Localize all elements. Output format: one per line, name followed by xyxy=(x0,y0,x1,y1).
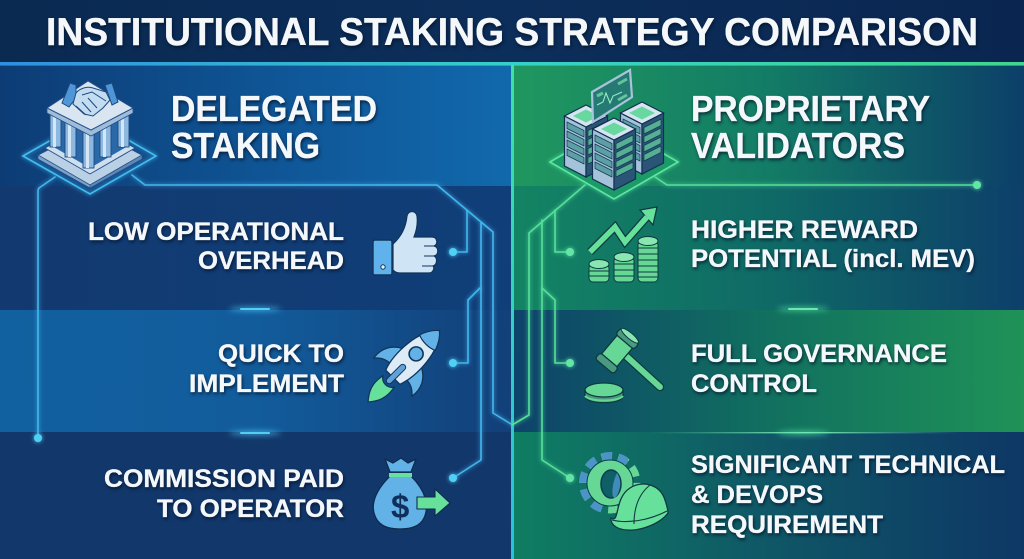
heading: proprietary validators: PROPRIETARY xyxy=(691,88,930,129)
panel: delegated staking xyxy=(0,65,512,559)
icon: gavel xyxy=(585,326,660,403)
text: significant technical devops requirement xyxy=(691,451,1005,539)
heading: delegated staking: STAKING xyxy=(171,125,320,166)
text: quick to implement xyxy=(189,340,344,398)
heading: proprietary validators: VALIDATORS xyxy=(691,125,905,166)
text: low operational overhead xyxy=(88,218,344,275)
text: higher reward potential: HIGHER REWARD xyxy=(691,216,918,244)
text: full governance control xyxy=(691,340,947,398)
icon: thumbs up xyxy=(373,212,438,275)
text: higher reward potential: POTENTIAL (incl. MEV) xyxy=(691,245,975,273)
text: quick to implement: QUICK TO xyxy=(218,340,344,368)
icon: rocket xyxy=(349,311,459,421)
text: commission paid to operator xyxy=(104,465,344,523)
panel: proprietary validators xyxy=(512,65,1024,559)
text: commission paid to operator: COMMISSION PAID xyxy=(104,465,344,493)
heading: delegated staking: DELEGATED xyxy=(171,88,377,129)
icon: bank building with handshake xyxy=(23,81,156,194)
icon: gear and hard hat xyxy=(584,456,668,530)
icon: server racks with monitor xyxy=(550,70,678,199)
connector lines: delegated xyxy=(34,175,511,482)
title: INSTITUTIONAL STAKING STRATEGY COMPARISON xyxy=(46,11,978,54)
icon: growth chart and coins xyxy=(589,207,658,282)
text: commission paid to operator: TO OPERATOR xyxy=(157,495,344,523)
title band xyxy=(0,0,1024,62)
heading: proprietary validators xyxy=(691,88,930,166)
centre divider xyxy=(511,65,514,559)
text: full governance control: CONTROL xyxy=(691,370,817,398)
text: significant technical devops requirement: SIGNIFICANT TECHNICAL xyxy=(691,451,1005,479)
text: higher reward potential xyxy=(691,216,975,273)
text: full governance control: FULL GOVERNANCE xyxy=(691,340,947,368)
text: quick to implement: IMPLEMENT xyxy=(189,370,344,398)
icon: money bag: $ xyxy=(391,488,409,525)
connector lines: proprietary xyxy=(512,177,981,482)
text: significant technical devops requirement: & DEVOPS xyxy=(691,481,823,509)
icon: money bag xyxy=(373,458,450,529)
text: low operational overhead: LOW OPERATIONAL xyxy=(88,218,344,246)
text: low operational overhead: OVERHEAD xyxy=(198,247,344,275)
heading: delegated staking xyxy=(171,88,377,166)
text: significant technical devops requirement: REQUIREMENT xyxy=(691,511,883,539)
header rule xyxy=(0,62,1024,66)
